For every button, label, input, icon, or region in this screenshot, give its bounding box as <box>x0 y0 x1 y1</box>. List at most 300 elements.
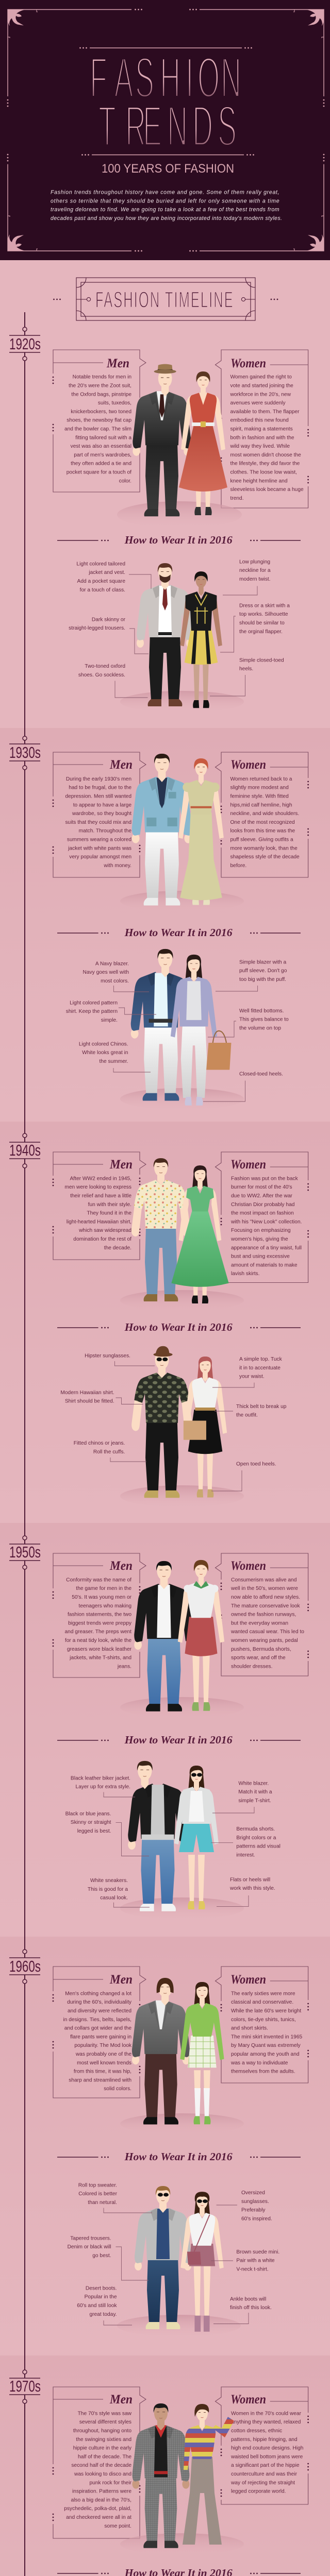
title: FASHION <box>90 46 241 110</box>
ground shadow <box>120 1088 244 1110</box>
ground shadow <box>120 1290 244 1311</box>
year marker 1970s: 1970s <box>9 2377 41 2395</box>
panel: 1960s men: sharp and streamlined with <box>69 2077 131 2083</box>
title <box>90 46 241 158</box>
figure: 2016 woman, white tee and suede mini <box>180 2192 224 2332</box>
panel: 1940s women: with his "New Look" collection. <box>230 1219 302 1225</box>
intro text: traveling delorean to find. We are going to take a look at a few of the best trends from <box>51 207 279 213</box>
intro text: others so terrible that they should be buried and left for only someone with a time <box>51 198 279 204</box>
panel: 1950s women: wanted casual wear. This led to <box>230 1629 304 1635</box>
year marker 1940s: 1940s <box>9 1141 41 1159</box>
panel: 1950s women: Consumerism was alive and <box>231 1577 297 1583</box>
callout: Dark skinny or <box>92 617 126 622</box>
panel: 1960s women: colors, tie-dye shirts, tunics, <box>231 2017 296 2023</box>
panel: 1930s men: wardrobe, so they bought <box>72 811 131 817</box>
callout: Two-toned oxford <box>85 664 125 669</box>
panel: 1970s women: anything they wanted, relaxed <box>231 2419 301 2425</box>
section band: 1970s <box>0 2355 330 2576</box>
panel: 1960s men: Men <box>109 1973 133 1987</box>
panel: 1960s men: and diversity were reflected <box>68 2008 131 2014</box>
panel: 1970s men: some point. <box>104 2523 131 2529</box>
callout <box>214 1404 287 1418</box>
figure: 2016 man, grey blazer <box>137 563 193 706</box>
callout <box>217 2190 272 2222</box>
callout <box>74 1440 146 1462</box>
panel: 1960s women: classical and conservative. <box>231 1999 293 2005</box>
figure: 1940s man, Hawaiian shirt <box>131 1158 190 1301</box>
panel: 1950s men: the game for men in the <box>76 1586 131 1591</box>
panel: 1950s men: and greaser. The preps went <box>64 1629 131 1635</box>
callout <box>78 664 147 698</box>
panel: 1920s women: embodied this new found <box>230 418 289 423</box>
panel: 1950s men <box>53 1553 146 1677</box>
callout: great today. <box>89 2312 117 2317</box>
callout: Match it with a <box>238 1789 272 1795</box>
figure: 2016 woman, white cardigan and teal shorts <box>174 1766 219 1909</box>
callout: Bermuda shorts. <box>236 1826 275 1832</box>
panel: 1940s men <box>53 1152 146 1260</box>
callout: Denim or black will <box>68 2244 111 2250</box>
panel: 1920s men: Men <box>106 357 129 370</box>
ground shadow <box>120 1897 244 1919</box>
panel: 1920s women: most women didn't choose the <box>230 452 301 458</box>
panel: 1940s women: Fashion was put on the back <box>231 1176 299 1181</box>
panel: 1960s men: most well known trends <box>77 2060 131 2066</box>
heading: fashion timeline plaque: FASHION TIMELINE <box>95 286 234 312</box>
callout: your waist. <box>239 1374 265 1380</box>
panel: 1920s women: available to them. The flapper <box>230 409 300 415</box>
panel: 1920s men: they often added a tie and <box>71 461 131 467</box>
callout: Brown suede mini. <box>236 2249 279 2255</box>
callout: A Navy blazer. <box>95 961 129 967</box>
callout: top works. Silhouette <box>239 612 288 617</box>
panel: 1970s men: the swinging sixties and <box>76 2437 131 2443</box>
year marker 1950s <box>9 1536 41 1569</box>
panel: 1930s men: had to be frugal, due to the <box>69 785 131 791</box>
panel: 1960s women: themselves from the adults. <box>231 2069 295 2075</box>
callout <box>211 1461 276 1491</box>
year marker 1930s: 1930s <box>9 743 41 761</box>
callout: the volume on top <box>239 1025 281 1031</box>
figure: 1930s woman, olive dress <box>178 758 224 905</box>
callout: shirt. Keep the pattern <box>66 1009 118 1014</box>
title: TRENDS <box>98 94 237 158</box>
panel: 1920s men: the 20's were the Zoot suit, <box>69 383 131 388</box>
how to wear heading 1930s: How to Wear It in 2016 <box>124 926 233 939</box>
panel: 1950s men: Conformity was the name of <box>66 1577 131 1583</box>
panel: 1940s men: They found it in the <box>87 1211 131 1216</box>
panel: 1970s men: throughout, hanging onto <box>73 2428 131 2434</box>
panel: 1970s men: The 70's style was saw <box>78 2411 132 2416</box>
panel: 1970s women: patterns, hippie fringing, and <box>231 2437 298 2443</box>
callout <box>65 1811 149 1856</box>
callout <box>76 561 151 593</box>
callout: Low plunging <box>239 559 270 565</box>
panel: 1970s women: cotton dresses, ethnic <box>231 2428 282 2434</box>
panel: 1940s men: which saw widespread <box>78 1228 131 1233</box>
year marker 1940s <box>9 1133 41 1168</box>
callout: legged is best. <box>77 1828 111 1834</box>
panel: 1920s men: vest was also an essential <box>71 444 131 449</box>
callout: Tapered trousers. <box>70 2235 111 2241</box>
panel: 1920s women: Women <box>230 357 266 370</box>
callout: White sneakers. <box>90 1878 128 1884</box>
figure: 1920s man in dark suit <box>133 364 191 516</box>
panel: 1960s women: The mini skirt invented in 1965 <box>231 2034 303 2040</box>
callout: interest. <box>236 1852 255 1858</box>
callout: Navy goes well with <box>83 970 129 975</box>
panel: 1950s men: teenagers who making <box>78 1603 131 1609</box>
panel: 1930s women: neckline, and wide shoulders. <box>230 811 299 817</box>
callout: 60's and still look <box>77 2303 117 2309</box>
panel: 1930s men: suits that they could mix and <box>65 820 131 825</box>
figure: 2016 man, biker jacket and hoodie <box>128 1761 188 1911</box>
year marker 1950s: 1950s <box>9 1543 41 1561</box>
panel: 1940s women: women's hips, giving the <box>230 1236 288 1242</box>
how to wear heading 1940s: How to Wear It in 2016 <box>124 1321 233 1333</box>
callout <box>85 1353 155 1366</box>
figure: 2016 woman, lavender blazer with bag <box>171 955 231 1106</box>
panel: 1950s women: now able to afford new styles. <box>231 1595 300 1600</box>
ground shadow <box>117 501 242 528</box>
panel: 1920s women <box>216 350 309 508</box>
panel: 1930s men: with money. <box>103 863 131 869</box>
year marker 1960s <box>9 1950 41 1984</box>
panel: 1940s men: the decade. <box>104 1245 131 1251</box>
panel: 1940s women: Christian Dior probably had <box>231 1202 295 1208</box>
panel: 1960s women: popular among the youth and <box>231 2052 300 2057</box>
panel: 1960s men: popularity. The Mod look <box>74 2043 132 2048</box>
panel: 1940s women: the most impact on fashion <box>231 1211 294 1216</box>
panel: 1940s women: burner for most of the 40's <box>231 1184 292 1190</box>
callout <box>216 959 287 991</box>
callout: Open toed heels. <box>236 1461 276 1467</box>
callout: modern twist. <box>239 577 271 582</box>
callout: Thick belt to break up <box>236 1404 287 1410</box>
callout: most colors. <box>101 978 129 984</box>
callout <box>217 1877 275 1907</box>
panel: 1930s women: looks from this time was the <box>230 828 295 834</box>
panel: 1960s women: The early sixties were more <box>231 1991 295 1996</box>
panel: 1970s men: also a big deal in the 70's, <box>71 2497 131 2503</box>
panel: 1940s women <box>216 1152 309 1283</box>
ground shadow <box>120 2113 244 2134</box>
panel: 1940s women: lavish skirts. <box>231 1271 259 1277</box>
callout: sunglasses. <box>241 2199 269 2205</box>
panel: 1940s men: domination for the rest of <box>73 1236 131 1242</box>
ground shadow <box>120 891 244 911</box>
callout: Simple blazer with a <box>239 959 286 965</box>
panel: 1960s women: was a way to individuate <box>230 2060 288 2066</box>
year marker 1930s <box>9 736 41 770</box>
callout: heels. <box>239 666 253 672</box>
figure: 1920s woman in red dress <box>179 371 227 515</box>
panel: 1920s men <box>53 350 146 492</box>
panel: 1970s women: counterculture and was their <box>231 2471 298 2477</box>
panel: 1950s men: jeans. <box>117 1664 131 1669</box>
callout: A simple top. Tuck <box>239 1357 283 1362</box>
panel: 1930s men: During the early 1930's men <box>66 776 131 782</box>
callout: Oversized <box>241 2190 265 2196</box>
section band: 1960s <box>0 1937 330 2355</box>
year marker 1960s: 1960s <box>9 1957 41 1975</box>
panel: 1940s men: After WW2 ended in 1945, <box>70 1176 131 1181</box>
panel: 1970s women: high end couture designs. High <box>231 2446 303 2451</box>
panel: 1970s men: was looking to disco and <box>74 2471 131 2477</box>
callout: This is good for a <box>88 1887 128 1892</box>
panel: 1960s men: solid colors. <box>104 2086 131 2092</box>
panel: 1920s women: wild way they lived. While <box>230 444 290 449</box>
panel: 1930s women: slightly more modest and <box>230 785 289 791</box>
panel: 1940s women: due to WW2. After the war <box>231 1193 293 1199</box>
callout: shoes. Go sockless. <box>78 672 125 678</box>
callout: Closed-toed heels. <box>239 1071 283 1077</box>
year marker 1920s <box>9 327 41 361</box>
callout: Fitted chinos or jeans. <box>74 1440 125 1446</box>
callout: simple T-shirt. <box>238 1798 271 1804</box>
callout <box>211 1826 280 1858</box>
callout: Dress or a skirt with a <box>239 603 290 608</box>
callout: the orginal flapper. <box>239 629 283 635</box>
panel: 1920s men: suits, tuxedos, <box>98 400 131 406</box>
panel: 1960s women: and short skirts. <box>231 2026 268 2031</box>
callout: should be similar to <box>239 620 285 626</box>
panel: 1970s men <box>53 2387 146 2538</box>
how to wear heading 1950s: How to Wear It in 2016 <box>124 1734 233 1746</box>
callout <box>60 1390 143 1404</box>
year marker 1970s <box>9 2370 41 2403</box>
panel: 1920s men: color. <box>119 478 131 484</box>
panel: 1930s women: hips,mid calf hemline, high <box>230 802 292 808</box>
panel: 1950s men: Men <box>109 1559 133 1573</box>
callout <box>223 559 271 595</box>
panel: 1920s women: vote and started joining the <box>230 383 293 388</box>
callout <box>212 1357 283 1387</box>
panel: 1960s men: flare pants were gaining in <box>70 2034 131 2040</box>
panel: 1960s men: Men's clothing changed a lot <box>65 1991 131 1996</box>
timeline spine <box>24 312 25 2576</box>
panel: 1950s men: greasers wore black leather <box>67 1647 132 1652</box>
panel: 1950s women: but the everyday woman <box>231 1620 288 1626</box>
callout: Preferably <box>241 2208 266 2213</box>
callout: Light colored Chinos. <box>79 1041 128 1047</box>
panel: 1970s men: hippie culture in the early <box>73 2446 132 2451</box>
figure: 1960s man, grey mod jacket <box>132 1978 190 2125</box>
figure: 2016 man, navy blazer <box>131 949 191 1101</box>
panel: 1930s women: more womanly look, than the <box>230 845 298 851</box>
panel: 1940s women: appearance of a tiny waist, full <box>231 1245 302 1251</box>
section band: 1950s <box>0 1523 330 1937</box>
panel: 1950s women: well in the 50's, women were <box>230 1586 298 1591</box>
figure: 2016 man, grey blazer and navy roll-neck <box>135 2186 191 2329</box>
callout <box>68 2235 148 2280</box>
panel: 1960s women: by Mary Quant was extremely <box>231 2043 301 2048</box>
callout: V-neck t-shirt. <box>236 2267 269 2272</box>
callout: Hipster sunglasses. <box>85 1353 130 1359</box>
panel: 1940s women: Women <box>230 1158 266 1172</box>
panel: 1930s women: Women returned back to a <box>230 776 292 782</box>
panel: 1940s men: men were looking to express <box>64 1184 131 1190</box>
panel: 1940s men: fun with their style. <box>88 1202 131 1208</box>
panel: 1970s men: inspiration. Patterns were <box>72 2489 131 2495</box>
panel: 1970s men: second half of the decade <box>71 2463 131 2468</box>
panel: 1960s men: was probably one of the <box>75 2052 131 2057</box>
panel: 1920s men: shoes, the newsboy flat cap <box>67 418 131 423</box>
panel: 1920s women: the lifestyle, they did favor the <box>230 461 300 467</box>
intro text <box>51 190 282 222</box>
callout: casual look. <box>100 1895 128 1901</box>
callout: than netural. <box>88 2200 117 2206</box>
callout: it in to accentuate <box>239 1365 280 1371</box>
panel: 1920s women: knee height hemline and <box>230 478 288 484</box>
panel: 1930s men: depression. Men still wanted <box>65 793 131 800</box>
callout: neckline for a <box>239 568 271 573</box>
callout: Popular in the <box>85 2294 117 2300</box>
panel: 1930s women: before. <box>230 863 246 869</box>
callout: Flats or heels will <box>230 1877 270 1883</box>
panel: 1960s men: and collars got wider and the <box>64 2026 131 2031</box>
intro text: Fashion trends throughout history have come and gone. Some of them really great, <box>51 190 279 196</box>
panel: 1930s women: One of the most recognized <box>230 820 295 825</box>
panel: 1940s men: light-hearted Hawaiian shirt, <box>67 1219 131 1225</box>
panel: 1930s men: Men <box>109 758 133 772</box>
callout: 60's inspired. <box>241 2216 272 2222</box>
callout <box>213 2296 272 2324</box>
figure: 2016 man, black print shirt <box>131 1346 192 1498</box>
figure: 1970s woman, striped sweater and flares <box>183 2404 234 2545</box>
panel: 1930s men: very popular amongst men <box>69 854 131 860</box>
panel: 1920s women: workforce in the 20's, new <box>230 392 291 397</box>
panel: 1920s women: spirit, making a statements <box>230 427 293 432</box>
callout <box>212 1781 272 1813</box>
callout: go best. <box>92 2253 111 2259</box>
panel: 1930s women: Women <box>230 758 266 772</box>
panel: 1960s men <box>53 1967 146 2098</box>
panel: 1920s men: and the bowler cap. The slim <box>64 427 131 432</box>
callout <box>71 1775 135 1797</box>
panel: 1930s women: puff sleeve. Giving outfits a <box>230 837 293 843</box>
panel: 1940s women: amount of materials to make <box>231 1262 298 1268</box>
callout: too big with the puff. <box>239 977 286 982</box>
figure: 1950s woman, red shorts <box>178 1560 224 1711</box>
callout: Roll the cuffs. <box>93 1449 125 1455</box>
ground shadow <box>120 691 244 713</box>
callout: Skinny or straight <box>71 1820 111 1825</box>
ground shadow <box>120 1697 244 1718</box>
section band: 1930s <box>0 728 330 1122</box>
panel: 1970s women: legged corporate world. <box>231 2489 286 2495</box>
panel: 1920s men: Notable trends for men in <box>73 375 131 380</box>
callout: White blazer. <box>238 1781 269 1786</box>
callout: Ankle boots will <box>230 2296 266 2302</box>
panel: 1970s men: Men <box>109 2393 133 2406</box>
panel: 1950s women <box>216 1553 309 1676</box>
panel: 1970s women: waisted bell bottom jeans were <box>230 2454 303 2460</box>
panel: 1970s men: punk rock for their <box>89 2480 132 2486</box>
panel: 1950s women: sports wear, and off the <box>231 1655 286 1661</box>
panel: 1930s men: summers wearing a colored <box>67 837 131 843</box>
callout <box>211 2249 279 2272</box>
panel: 1930s men: to appear to have a large <box>73 802 131 808</box>
panel: 1950s women: pushers, Bermuda shorts, <box>231 1647 291 1652</box>
panel: 1930s women <box>216 752 309 877</box>
callout: Add a pocket square <box>77 579 125 584</box>
callout <box>79 1041 151 1072</box>
subtitle: 100 YEARS OF FASHION <box>102 162 234 176</box>
callout: Roll top sweater. <box>78 2182 117 2188</box>
panel: 1930s women: feminine style. With fitted <box>230 793 289 800</box>
panel: 1960s men: from this time, it was hip, <box>74 2069 131 2075</box>
figure: 1960s woman, green blouse and plaid mini skirt <box>180 1982 224 2124</box>
callout <box>203 1071 283 1101</box>
callout: Black or blue jeans. <box>65 1811 111 1817</box>
panel: 1950s women: shoulder dresses. <box>231 1664 272 1669</box>
how to wear heading 1960s: How to Wear It in 2016 <box>124 2150 233 2163</box>
callout: Simple closed-toed <box>239 657 284 663</box>
panel: 1970s men: half of the decade. The <box>78 2454 131 2460</box>
figure: 1950s man, greaser leather jacket <box>134 1561 194 1711</box>
callout <box>210 657 284 696</box>
figure: 2016 woman, white top and black skirt <box>184 1357 227 1497</box>
callout <box>78 2182 152 2213</box>
panel: 1970s women: Women <box>230 2393 266 2406</box>
section band: 1940s <box>0 1122 330 1523</box>
callout: patterns add visual <box>236 1844 280 1850</box>
panel: 1950s women: Women <box>230 1559 266 1573</box>
panel: 1950s women: The mature conservative look <box>231 1603 301 1609</box>
callout: the outfit. <box>236 1413 258 1418</box>
panel: 1940s men: their relief and have a little <box>70 1193 131 1199</box>
panel: 1950s women: owned the fashion runways, <box>231 1612 296 1618</box>
panel: 1970s men: several different styles <box>79 2419 131 2425</box>
callout: Bright colors or a <box>236 1835 276 1841</box>
panel: header <box>0 0 330 260</box>
callout: puff sleeve. Don't go <box>239 968 287 974</box>
callout <box>69 617 148 654</box>
ground shadow <box>120 1485 244 1507</box>
panel: 1930s women: shapeless style of the decade <box>230 854 300 860</box>
panel: 1970s men: and checkered were all in at <box>66 2515 131 2520</box>
panel: 1920s men: knickerbockers, two toned <box>71 409 131 415</box>
panel: 1920s men: part of men's wardrobes, <box>74 452 131 458</box>
callout <box>208 1008 289 1037</box>
panel: 1920s men: the Oxford bags, pinstripe <box>71 392 131 397</box>
callout: work with this style. <box>229 1886 275 1891</box>
callout: straight-legged trousers. <box>69 625 125 631</box>
callout: Light colored pattern <box>70 1000 118 1006</box>
callout: Layer up for extra style. <box>76 1784 130 1790</box>
callout: the summer. <box>100 1059 128 1064</box>
panel: 1920s men: pocket square for a touch of <box>67 470 131 475</box>
panel: 1920s women: avenues were suddenly <box>230 400 286 406</box>
figure: 1930s man, blue jacket and white trousers <box>132 754 192 906</box>
panel: 1950s men: biggest trends were preppy <box>68 1620 132 1626</box>
panel: 1920s women: Women gained the right to <box>230 375 292 380</box>
ground shadow <box>120 2533 244 2555</box>
year marker 1920s: 1920s <box>9 335 41 353</box>
callout: Desert boots. <box>86 2285 117 2291</box>
panel: 1950s men: for a neat tidy look, while the <box>65 1638 131 1643</box>
panel: 1960s women: While the late 60's were bright <box>231 2008 301 2014</box>
callout: simple. <box>101 1018 118 1023</box>
panel: 1970s women: Women in the 70's could wear <box>231 2411 302 2416</box>
figure: 2016 woman, black and yellow <box>180 571 222 708</box>
callout: Light colored tailored <box>76 561 125 567</box>
panel: 1920s women: both in fashion and with the <box>230 435 294 440</box>
ornamental frame <box>7 9 324 251</box>
callout <box>88 1878 150 1907</box>
panel: 1950s men: 50's. It was young men or <box>72 1595 132 1600</box>
